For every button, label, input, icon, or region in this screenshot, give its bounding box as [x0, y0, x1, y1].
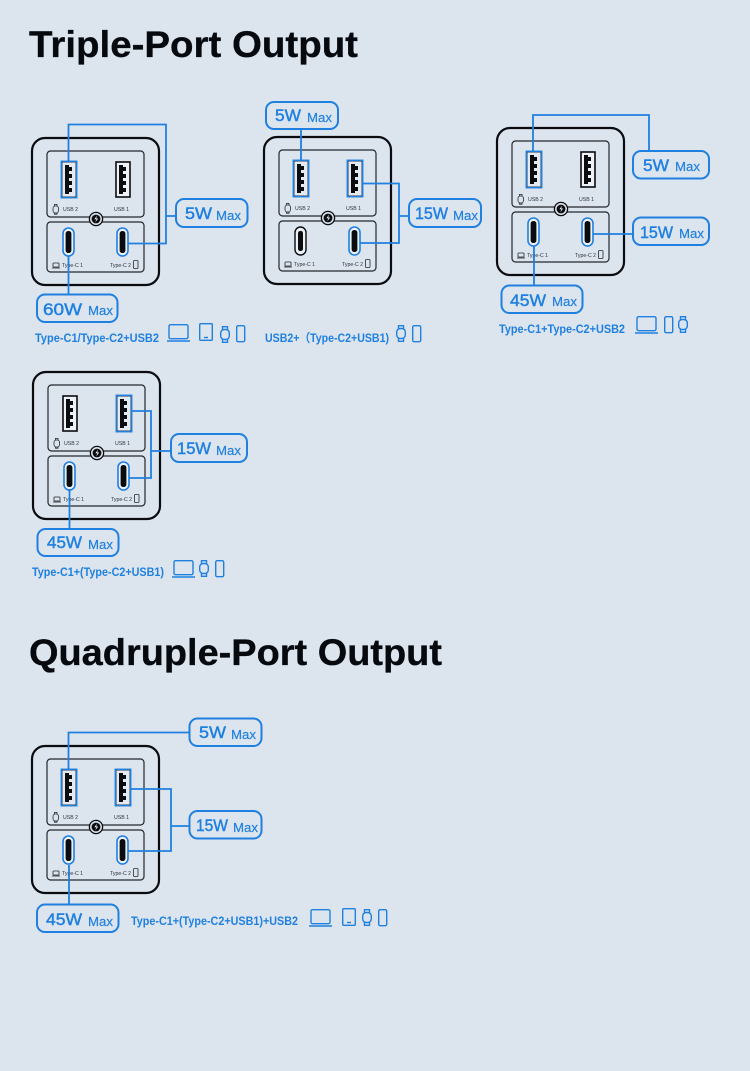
callout: 5W Max: Max [307, 110, 333, 125]
device icons 2 [397, 326, 421, 342]
charger 5 [32, 746, 159, 893]
charger 2: USB 1 [346, 206, 361, 212]
charger 2: Type-C 2 [342, 262, 363, 268]
caption 5: Type-C1+(Type-C2+USB1)+USB2 [131, 916, 298, 928]
callout: 60W Max: 60W [43, 300, 82, 319]
callout: 5W Max: 5W [643, 156, 669, 175]
charger 5: Type-C 2 [110, 871, 131, 877]
title: Triple-Port Output: Triple-Port Output [29, 24, 358, 65]
callout: 15W Max: Max [453, 208, 479, 223]
diagram 5: Type-C1+(Type-C2+USB1)+USB2 [32, 718, 387, 932]
connector lines 4 [70, 411, 171, 528]
connector lines 3 [533, 115, 649, 285]
charger 1: USB 1 [114, 207, 129, 213]
callout: 5W Max: 5W [199, 723, 226, 742]
charger 5: USB 1 [114, 815, 129, 821]
connector lines 2 [301, 129, 409, 243]
charger 4: Type-C 2 [111, 497, 132, 503]
caption 4: Type-C1+(Type-C2+USB1) [32, 567, 164, 579]
callout: 15W Max [190, 811, 262, 838]
charger 1: USB 2 [63, 207, 78, 213]
device icons 3 [635, 317, 687, 333]
charger 3: Type-C 2 [575, 253, 596, 259]
charger 4: Type-C 1 [63, 497, 84, 503]
callout: 45W Max: 45W [510, 291, 546, 310]
callout: 45W Max [37, 904, 118, 932]
callout: 45W Max [38, 529, 118, 556]
charger 4 [33, 372, 160, 519]
callout: 15W Max: Max [679, 226, 705, 241]
callout: 60W Max [37, 294, 118, 322]
callout: 15W Max [171, 434, 247, 462]
callout: 5W Max [176, 199, 248, 227]
charger 1 [32, 138, 159, 285]
charger 2: Type-C 1 [294, 262, 315, 268]
callout: 15W Max: 15W [640, 223, 673, 242]
charger 3: USB 1 [579, 197, 594, 203]
callout: 15W Max: 15W [415, 204, 448, 223]
device icons 1 [167, 324, 245, 342]
charger 5: Type-C 1 [62, 871, 83, 877]
callout: 5W Max [633, 151, 709, 178]
caption 1: Type-C1/Type-C2+USB2 [35, 333, 159, 345]
callout: 60W Max: Max [88, 303, 114, 318]
charger 2 [264, 137, 391, 284]
connector lines 1 [68, 124, 176, 294]
diagram 1: Type-C1/Type-C2+USB2 [32, 124, 248, 345]
charger 3 [497, 128, 624, 275]
device icons 4 [172, 561, 224, 577]
charger 4: USB 1 [115, 441, 130, 447]
charger 4: USB 2 [64, 441, 79, 447]
title: Quadruple-Port Output: Quadruple-Port Output [29, 632, 442, 673]
charger 2: USB 2 [295, 206, 310, 212]
diagram 4: Type-C1+(Type-C2+USB1) [32, 372, 247, 579]
callout: 5W Max: 5W [185, 204, 212, 223]
diagram 3: Type-C1+Type-C2+USB2 [497, 115, 709, 336]
callout: 5W Max: Max [675, 159, 701, 174]
callout: 45W Max: 45W [47, 533, 82, 552]
callout: 15W Max: Max [216, 443, 242, 458]
charger 3: Type-C 1 [527, 253, 548, 259]
caption 3: Type-C1+Type-C2+USB2 [499, 324, 625, 336]
callout: 5W Max [266, 102, 338, 129]
callout: 45W Max: Max [552, 294, 578, 309]
callout: 15W Max: 15W [177, 439, 211, 458]
callout: 15W Max: 15W [196, 816, 228, 835]
callout: 15W Max [409, 199, 481, 227]
callout: 5W Max [190, 718, 262, 746]
connector lines 5 [68, 732, 189, 904]
charger 5: USB 2 [63, 815, 78, 821]
callout: 45W Max: Max [88, 537, 114, 552]
callout: 45W Max: Max [88, 914, 114, 929]
callout: 5W Max: 5W [275, 106, 301, 125]
diagram 2: USB2+(Type-C2+USB1) [264, 102, 481, 345]
callout: 15W Max [633, 218, 709, 245]
charger 1: Type-C 1 [62, 263, 83, 269]
callout: 45W Max: 45W [46, 910, 82, 929]
charger 3: USB 2 [528, 197, 543, 203]
callout: 15W Max: Max [233, 820, 259, 835]
callout: 5W Max: Max [231, 727, 257, 742]
callout: 45W Max [502, 286, 582, 313]
device icons 5 [309, 909, 387, 926]
callout: 5W Max: Max [216, 208, 242, 223]
charger 1: Type-C 2 [110, 263, 131, 269]
caption 2: USB2+（Type-C2+USB1) [265, 331, 389, 345]
